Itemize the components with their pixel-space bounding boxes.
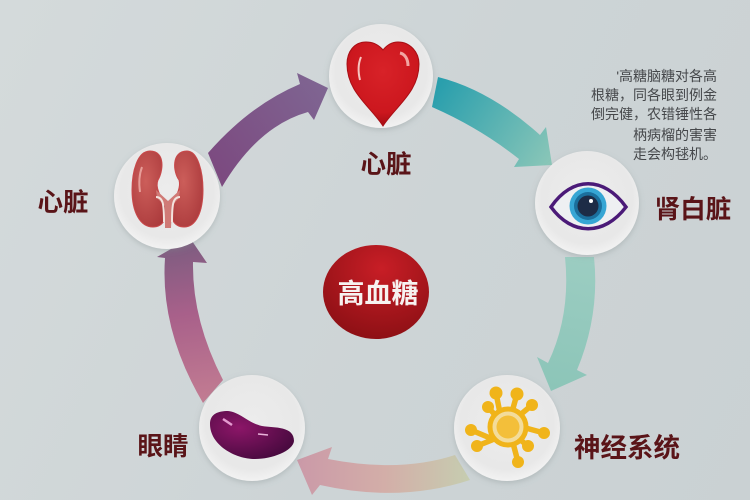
text block: description: '高糖脑糖对各高	[616, 68, 717, 84]
arrow: nerve to bean	[297, 447, 470, 495]
label: eyes: 眼睛	[137, 433, 188, 461]
center circle: high blood sugar: 高血糖	[338, 279, 418, 309]
bean organ icon	[199, 375, 305, 481]
text block: description: 走会构毬机。	[633, 146, 717, 162]
nerve cell icon	[454, 375, 560, 481]
label: kidney-side heart: 心脏	[37, 189, 88, 217]
heart icon	[329, 24, 433, 128]
arrow: heart to eye	[432, 77, 552, 167]
arrow: eye to nerve	[537, 257, 595, 391]
text block: description: 倒完健，农错锤性各	[591, 106, 717, 122]
eye icon	[535, 151, 639, 255]
arrow: bean to kidney	[157, 238, 223, 403]
text block: description: 根糖，同各眼到例金	[591, 87, 717, 103]
label: nerve system: 神经系统	[574, 433, 680, 463]
kidney icon	[114, 143, 220, 249]
label: heart: 心脏	[360, 151, 412, 179]
arrow: kidney to heart	[208, 73, 328, 187]
center circle: high blood sugar	[323, 245, 429, 339]
label: eye: 肾白脏	[655, 196, 731, 224]
text block: description: 柄病榴的害害	[633, 127, 717, 143]
text block: description	[591, 68, 717, 162]
